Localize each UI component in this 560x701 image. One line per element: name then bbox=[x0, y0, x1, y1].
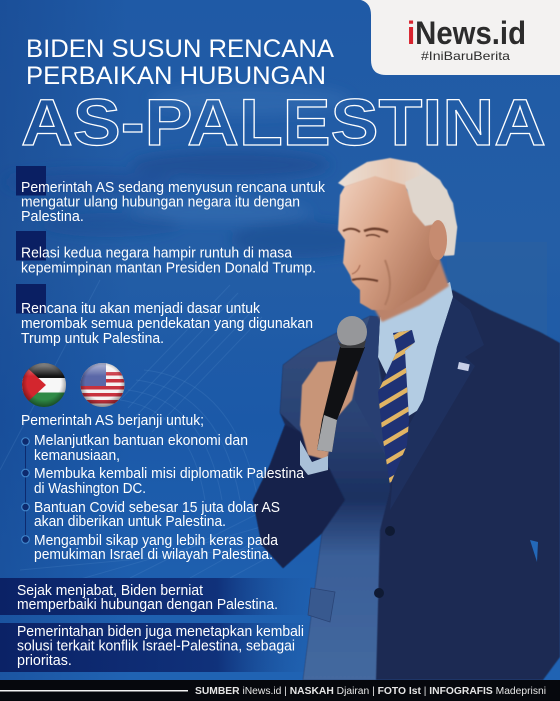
closing text 1: Sejak menjabat, Biden berniat bbox=[17, 583, 203, 599]
icon: USA flag bbox=[80, 363, 125, 407]
logo wordmark: iNews.id bbox=[407, 15, 526, 51]
paragraph 2: kepemimpinan mantan Presiden Donald Trump. bbox=[21, 260, 316, 276]
decorative navy square 3 bbox=[16, 284, 46, 314]
ear bbox=[429, 220, 447, 260]
head and face bbox=[338, 176, 440, 310]
decorative navy square 1 bbox=[16, 166, 46, 196]
microphone bbox=[317, 316, 367, 452]
list item 2: Membuka kembali misi diplomatik Palestina bbox=[34, 466, 304, 482]
suit silhouette bbox=[253, 290, 560, 680]
paragraph 2 bbox=[21, 246, 316, 276]
logo panel bbox=[361, 0, 560, 75]
closing text 1 bbox=[17, 583, 278, 613]
list item 4 bbox=[34, 533, 278, 563]
closing text 2: prioritas. bbox=[17, 653, 72, 669]
dark sleeve bbox=[253, 425, 345, 568]
blue gap near right arm bbox=[530, 540, 538, 562]
list item 2 bbox=[34, 466, 304, 497]
hair bbox=[338, 158, 457, 256]
shirt cuff bbox=[300, 440, 328, 475]
paragraph 2: Relasi kedua negara hampir runtuh di masa bbox=[21, 246, 292, 262]
neck bbox=[372, 260, 449, 322]
closing text 2 bbox=[17, 624, 304, 669]
tie bbox=[378, 330, 415, 484]
title outlined: AS-PALESTINA: AS-PALESTINA bbox=[21, 85, 546, 159]
paragraph 1 bbox=[21, 180, 326, 225]
bottom strip 1 bbox=[0, 578, 310, 615]
paragraph 3: merombak semua pendekatan yang digunakan bbox=[21, 316, 313, 332]
shirt collar bbox=[378, 282, 453, 417]
list item 3: akan diberikan untuk Palestina. bbox=[34, 514, 226, 530]
paragraph 3 bbox=[21, 301, 313, 347]
closing text 2: solusi terkait konflik Israel-Palestina, sebagai bbox=[17, 638, 295, 654]
footer credits: SUMBER iNews.id | NASKAH Djairan | FOTO Ist | INFOGRAFIS Madeprisni bbox=[195, 686, 546, 697]
paragraph 1: Palestina. bbox=[21, 209, 84, 225]
list item 1: kemanusiaan, bbox=[34, 448, 120, 464]
title: PERBAIKAN HUBUNGAN bbox=[26, 62, 326, 90]
list item 1 bbox=[34, 433, 248, 464]
list item 4: pemukiman Israel di wilayah Palestina. bbox=[34, 547, 273, 563]
list item 3: Bantuan Covid sebesar 15 juta dolar AS bbox=[34, 500, 280, 516]
flag pin bbox=[457, 362, 470, 371]
face features bbox=[343, 229, 390, 305]
closing text 1: memperbaiki hubungan dengan Palestina. bbox=[17, 597, 278, 613]
paragraph 1: mengatur ulang hubungan negara itu dengan bbox=[21, 194, 300, 210]
photo: Joe Biden speaking bbox=[253, 158, 560, 680]
footer bar bbox=[0, 680, 560, 701]
paragraph 1: Pemerintah AS sedang menyusun rencana untuk bbox=[21, 180, 326, 196]
bottom strip 2 bbox=[0, 623, 310, 672]
pocket flap bbox=[308, 588, 335, 622]
logo tagline: #IniBaruBerita bbox=[421, 49, 510, 63]
right lapel bbox=[390, 297, 484, 510]
title bbox=[26, 35, 334, 90]
hand holding microphone bbox=[300, 360, 358, 460]
title: BIDEN SUSUN RENCANA bbox=[26, 35, 334, 63]
list item 1: Melanjutkan bantuan ekonomi dan bbox=[34, 433, 248, 449]
left lapel bbox=[352, 316, 385, 455]
paragraph 3: Trump untuk Palestina. bbox=[21, 331, 164, 347]
side hair bbox=[405, 172, 457, 255]
decorative navy square 2 bbox=[16, 231, 46, 260]
bullet timeline bbox=[22, 438, 29, 543]
jacket left panel bbox=[280, 316, 390, 680]
buttons bbox=[374, 526, 395, 598]
list item 4: Mengambil sikap yang lebih keras pada bbox=[34, 533, 278, 549]
list item 3 bbox=[34, 500, 280, 530]
closing text 2: Pemerintahan biden juga menetapkan kembali bbox=[17, 624, 304, 640]
icon: Palestine flag bbox=[22, 363, 66, 408]
list heading: Pemerintah AS berjanji untuk; bbox=[21, 413, 204, 429]
paragraph 3: Rencana itu akan menjadi dasar untuk bbox=[21, 301, 261, 317]
list item 2: di Washington DC. bbox=[34, 481, 146, 497]
